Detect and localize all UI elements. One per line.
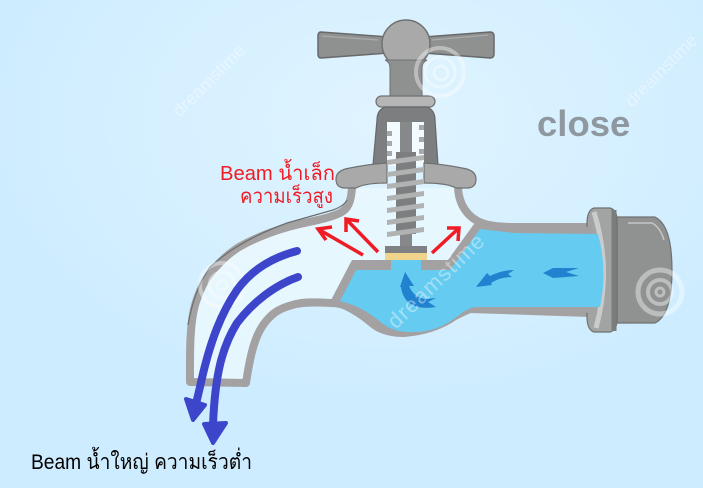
faucet body dark outer edge	[188, 200, 347, 325]
faucet bonnet	[373, 107, 438, 166]
label: small beam high speed: Beam น้ำเล็ก	[220, 159, 335, 185]
blue water streams	[186, 251, 298, 443]
spiral watermarks	[200, 48, 682, 314]
watermark text: dreamstime	[169, 40, 249, 121]
watermark text	[169, 30, 701, 334]
label: close: close	[537, 103, 630, 144]
watermark text: dreamstime	[382, 229, 489, 334]
label: small beam high speed: ความเร็วสูง	[240, 183, 333, 209]
label: small beam high speed	[220, 159, 335, 209]
faucet handle	[318, 20, 494, 107]
flow arrows in pipe	[400, 268, 579, 308]
pipe flange	[587, 208, 617, 332]
label: large beam low speed: Beam น้ำใหญ่ ความเร็วต่ำ	[31, 447, 252, 474]
faucet dome	[336, 163, 476, 188]
valve stem and spring	[385, 122, 427, 260]
watermark text: dreamstime	[621, 30, 701, 111]
red arrows	[318, 219, 459, 255]
valve partition	[330, 224, 599, 333]
faucet body	[190, 188, 590, 383]
pipe cap	[617, 217, 672, 323]
water	[340, 229, 604, 332]
